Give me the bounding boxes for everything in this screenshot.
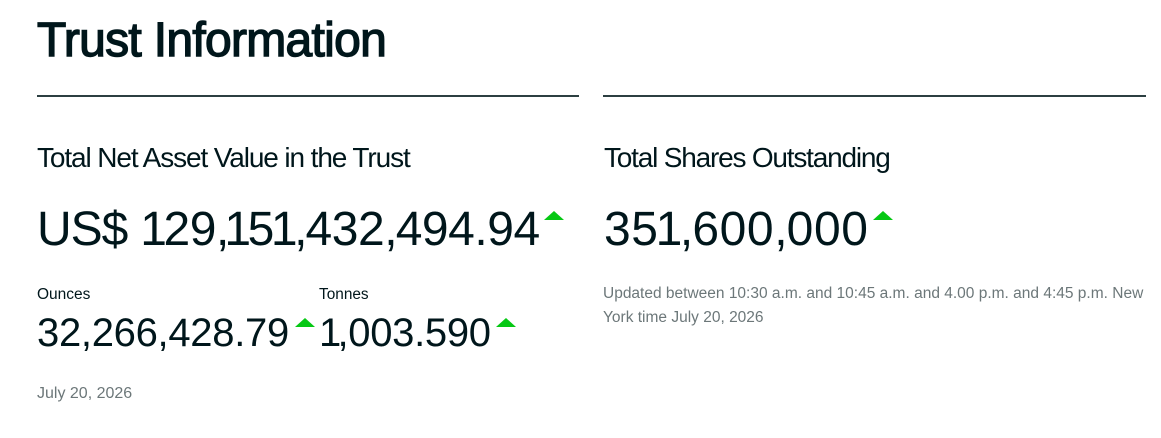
update note: Updated between 10:30 a.m. and 10:45 a.m. and 4.00 p.m. and 4:45 p.m. New: [603, 285, 1143, 302]
icon: up arrow shares: [873, 211, 893, 220]
label: ounces: Ounces: [37, 286, 90, 303]
update note: York time July 20, 2026: [603, 309, 764, 326]
heading: total shares outstanding: Total Shares Outstanding: [604, 142, 890, 173]
value: net asset value: US$ 129,151,432,494.94: [37, 203, 540, 256]
divider: left column: [37, 95, 579, 97]
value: shares outstanding: 351,600,000: [604, 203, 869, 256]
value: ounces: 32,266,428.79: [37, 311, 289, 355]
title: Trust Information: [37, 14, 386, 67]
date note: July 20, 2026: [37, 385, 132, 402]
value: tonnes: 1,003.590: [319, 311, 491, 355]
label: tonnes: Tonnes: [319, 286, 369, 303]
update note: [603, 285, 1144, 326]
icon: up arrow tonnes: [496, 318, 516, 327]
icon: up arrow net asset value: [544, 211, 564, 220]
divider: right column: [603, 95, 1146, 97]
icon: up arrow ounces: [295, 318, 315, 327]
heading: total net asset value: Total Net Asset Value in the Trust: [37, 142, 410, 173]
